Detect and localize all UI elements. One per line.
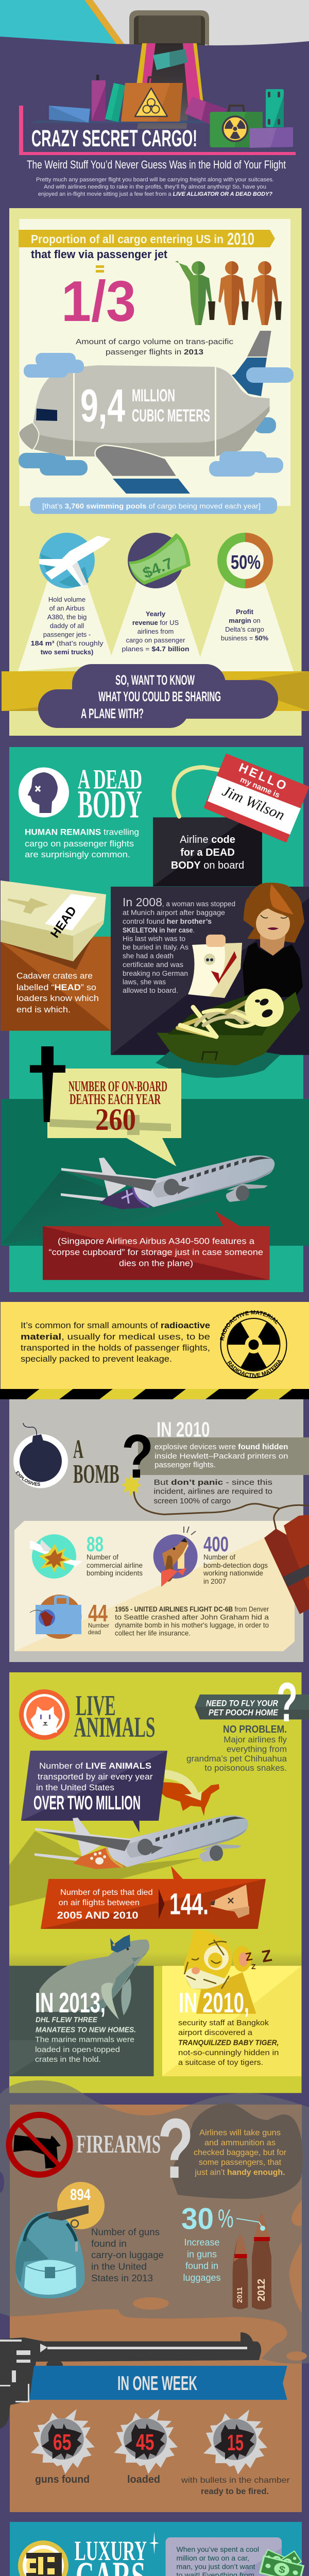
corpse cupboard callout: dies on the plane) bbox=[119, 1258, 193, 1268]
9.4 million stat bbox=[80, 380, 210, 432]
tiger box: TRANQUILIZED BABY TIGER, bbox=[178, 2038, 279, 2047]
stat: detection dogs: Number of bbox=[203, 1553, 235, 1561]
icon: passengers, one of three highlighted bbox=[175, 261, 282, 325]
pet pooch banner bbox=[195, 1671, 309, 1733]
icon: cat badge bbox=[19, 1689, 70, 1740]
orange crate panel: end is which. bbox=[16, 1005, 71, 1014]
stat: 30 percent increase: found in bbox=[185, 2261, 218, 2271]
equals sign bbox=[96, 265, 104, 273]
no problem text bbox=[186, 1724, 287, 1773]
tiger box: security staff at Bangkok bbox=[178, 2019, 269, 2027]
olive band with explosives text: passenger flights. bbox=[154, 1461, 216, 1469]
on-board deaths stat bbox=[68, 1079, 167, 1137]
don't panic text: incident, airlines are required to bbox=[153, 1487, 272, 1496]
icon: dead dog bbox=[211, 1885, 249, 1918]
name tag bbox=[174, 755, 308, 841]
stat: detection dogs: in 2007 bbox=[203, 1578, 226, 1585]
question text: SO, WANT TO KNOW bbox=[115, 672, 195, 688]
panel: a dead body bbox=[1, 747, 309, 1292]
lilac text box: When you’ve spent a cool bbox=[176, 2545, 259, 2553]
illustration: passenger jet with purple tail bbox=[61, 1155, 274, 1209]
human remains text: HUMAN REMAINS travelling bbox=[25, 827, 139, 837]
question text: A PLANE WITH? bbox=[81, 706, 144, 721]
purple flat case bbox=[250, 127, 293, 148]
icon: bomb: EXPLOSIVES bbox=[15, 1471, 40, 1486]
panel: a bomb bbox=[9, 1399, 309, 1662]
icon: dollar bill on purple circle: $4.7 bbox=[141, 555, 176, 582]
gold banner bbox=[19, 229, 275, 248]
lilac text box: million or two on a car, bbox=[176, 2554, 249, 2562]
swimming pools pill bbox=[30, 498, 277, 514]
teal background bbox=[9, 747, 303, 1292]
intro paragraph: enjoyed an in-flight movie sitting just a few feet from a LIVE ALLIGATOR OR A DEAD BODY? bbox=[38, 191, 272, 197]
dark smoke blob with text bbox=[171, 2103, 303, 2199]
airline code box: for a DEAD bbox=[180, 847, 235, 858]
stat: 30 percent increase: in guns bbox=[187, 2249, 217, 2260]
title frame bbox=[19, 106, 296, 155]
icon: bullets 2011 and 2012: 2011 bbox=[235, 2287, 244, 2303]
stat: 15 ready to be fired: 15 bbox=[227, 2430, 244, 2455]
don't panic text bbox=[153, 1478, 272, 1505]
shadow bbox=[156, 1051, 281, 1078]
section heading: ANIMALS bbox=[74, 1711, 156, 1743]
in one week banner: IN ONE WEEK bbox=[117, 2372, 197, 2395]
stat: 15 ready to be fired bbox=[181, 2410, 290, 2496]
manatee box: MANATEES TO NEW HOMES. bbox=[36, 2025, 136, 2034]
pets died callout: on air flights between bbox=[59, 1899, 140, 1907]
icon: radiation badge bbox=[220, 1310, 287, 1378]
icon: orange passenger bbox=[251, 261, 282, 325]
panel inner bbox=[20, 219, 290, 506]
one third stat: 1/3 bbox=[61, 269, 136, 333]
stat: number dead: to Seattle crashed after John Graham hid a bbox=[115, 1613, 269, 1621]
icon: bullets 2011 and 2012: 2012 bbox=[256, 2279, 267, 2301]
dark smoke blob with text: just ain’t handy enough. bbox=[195, 2168, 285, 2177]
skeleton story panel: certificate and was bbox=[123, 961, 183, 969]
manatee box bbox=[9, 1935, 153, 2076]
subheading: that flew via passenger jet bbox=[31, 248, 168, 261]
radioactive text bbox=[21, 1320, 210, 1364]
icon: dynamite bbox=[264, 1515, 309, 1614]
panel background bbox=[9, 208, 302, 736]
stat: 894 guns with backpack bbox=[15, 2182, 164, 2298]
pets died callout: 144. bbox=[169, 1888, 209, 1921]
gun smoke overlay bbox=[0, 2080, 309, 2364]
swimming pools pill: [that’s 3,760 swimming pools of cargo being moved each year] bbox=[42, 502, 261, 510]
don't panic text: But don’t panic - since this bbox=[153, 1478, 272, 1487]
plane shadow beam bbox=[1, 1171, 227, 1244]
skeleton story panel: control found her brother’s bbox=[123, 918, 212, 925]
stat: number dead: dead bbox=[88, 1629, 101, 1636]
revenue text: Yearly bbox=[146, 610, 166, 618]
airline code box: BODY on board bbox=[171, 860, 244, 871]
skeleton story panel: she had a death bbox=[123, 952, 174, 960]
cargo pile illustration bbox=[31, 49, 293, 148]
stat: detection dogs: working nationwide bbox=[203, 1569, 263, 1577]
green case bbox=[105, 83, 125, 122]
live animals speech bubble: Number of LIVE ANIMALS bbox=[39, 1761, 151, 1771]
stat: 30 percent increase bbox=[181, 2202, 271, 2310]
section heading: A bbox=[73, 1435, 83, 1464]
no problem text: to poisonous snakes. bbox=[204, 1763, 287, 1773]
corpse cupboard callout bbox=[43, 1211, 270, 1280]
icon: EB badge bbox=[18, 2540, 68, 2576]
gold banner: 2010 bbox=[227, 229, 254, 248]
manatee box: DHL FLEW THREE bbox=[36, 2015, 98, 2024]
stat: 15 ready to be fired: ready to be fired. bbox=[201, 2486, 269, 2496]
section heading: A DEAD bbox=[78, 764, 142, 794]
profit margin text bbox=[221, 608, 269, 642]
live animals speech bubble: transported by air every year bbox=[38, 1772, 153, 1782]
orange crate panel: loaders know which bbox=[16, 993, 99, 1003]
suitcase bbox=[157, 992, 300, 1065]
9.4 million stat: 9,4 bbox=[80, 380, 125, 432]
cross tombstone callout bbox=[30, 1046, 181, 1166]
blue case bbox=[49, 106, 90, 123]
panel: live animals bbox=[9, 1671, 309, 2093]
stat: detection dogs: bomb-detection dogs bbox=[203, 1562, 268, 1569]
stat: bombing incidents: Number of bbox=[87, 1553, 118, 1561]
dark smoke blob with text: Airlines will take guns bbox=[199, 2129, 281, 2137]
firearms section content bbox=[0, 2101, 303, 2496]
illustration: passenger jet with paw print tail bbox=[35, 1816, 248, 1869]
name tag: my name is bbox=[239, 775, 281, 800]
stat: detection dogs bbox=[153, 1527, 268, 1587]
manatee box: IN 2013, bbox=[35, 1987, 106, 2019]
woman bbox=[243, 883, 304, 997]
panel background bbox=[9, 1672, 302, 2093]
stat: 30 percent increase: 30 bbox=[181, 2202, 214, 2236]
human remains text: are surprisingly common. bbox=[25, 850, 130, 859]
dark smoke blob with text: some passengers, that bbox=[199, 2158, 282, 2167]
9.4 million stat: CUBIC METERS bbox=[132, 406, 210, 426]
stat: 15 ready to be fired: with bullets in the chamber bbox=[181, 2476, 290, 2485]
dark green band bbox=[1, 1099, 309, 1246]
green radioactive case bbox=[210, 106, 263, 147]
icon: radiation badge: RADIOACTIVE MATERIAL bbox=[220, 1310, 278, 1341]
icon: bomb bbox=[13, 1423, 68, 1488]
stat: 45 loaded: loaded bbox=[127, 2474, 160, 2485]
on-board deaths stat: DEATHS EACH YEAR bbox=[70, 1092, 161, 1108]
icon: bullets 2011 and 2012 bbox=[233, 2213, 271, 2310]
live animals speech bubble bbox=[21, 1751, 167, 1833]
olive band with explosives text: explosive devices were found hidden bbox=[154, 1443, 288, 1451]
floor shadow bbox=[31, 121, 206, 123]
volume caption: Amount of cargo volume on trans-pacific bbox=[76, 338, 233, 346]
radioactive text: transported in the holds of passenger flights, bbox=[21, 1343, 210, 1353]
stat: number dead: 44 bbox=[88, 1600, 108, 1626]
volume caption bbox=[76, 338, 233, 357]
on-board deaths stat: NUMBER OF ON-BOARD bbox=[68, 1079, 167, 1095]
stat: 894 guns with backpack: carry-on luggage bbox=[91, 2250, 164, 2260]
profit margin text: Delta’s cargo bbox=[225, 625, 264, 633]
pet pooch banner: PET POOCH HOME bbox=[209, 1707, 279, 1718]
revenue text: planes = $4.7 billion bbox=[122, 645, 190, 653]
in 2010 heading: IN 2010 bbox=[157, 1418, 210, 1442]
pet pooch banner: NEED TO FLY YOUR bbox=[206, 1699, 279, 1708]
in one week banner bbox=[29, 2366, 287, 2400]
stat: number dead: 1955 - UNITED AIRLINES FLIGHT DC-6B from Denver bbox=[115, 1605, 269, 1613]
panel: proportion of cargo bbox=[9, 208, 302, 736]
hold volume text: daddy of all bbox=[50, 622, 84, 630]
skeleton story panel: SKELETON in her case. bbox=[123, 926, 195, 934]
tiger box: IN 2010, bbox=[179, 1987, 249, 2019]
death certificate bbox=[188, 935, 242, 998]
icon: green passenger bbox=[175, 261, 215, 325]
illustration: woman with certificate and skeleton in suitcase bbox=[156, 883, 304, 1078]
stat: bombing incidents: bombing incidents bbox=[87, 1569, 143, 1577]
stat: number dead: dynamite bomb in his mother's luggage, in order to bbox=[115, 1621, 269, 1629]
radioactive text: material , usually for medical uses, to be bbox=[21, 1332, 210, 1342]
purple upright case bbox=[92, 75, 106, 121]
stat: bombing incidents bbox=[30, 1532, 143, 1579]
dark smoke blob with text: and ammunition as bbox=[204, 2139, 276, 2147]
skeleton story panel: be buried in Italy. As bbox=[123, 943, 188, 951]
panel: firearms background bbox=[10, 2105, 302, 2512]
gold banner: Proportion of all cargo entering US in bbox=[31, 232, 224, 246]
profit margin text: business = 50% bbox=[221, 634, 269, 642]
stat: 65 guns found: 65 bbox=[53, 2430, 71, 2455]
volume caption: passenger flights in 2013 bbox=[106, 348, 203, 357]
skeleton story panel bbox=[111, 887, 309, 1055]
sparkles bbox=[64, 2532, 159, 2576]
stat: number dead: Number bbox=[88, 1622, 109, 1629]
section heading bbox=[74, 1690, 156, 1743]
hold volume text: two semi trucks) bbox=[41, 648, 93, 656]
illustration: sleeping tiger bbox=[184, 1929, 256, 2014]
orange biohazard case bbox=[121, 77, 183, 122]
intro paragraph: And with airlines needing to rake in the profits, they’ll fly almost anything! So, have you bbox=[44, 184, 266, 190]
no problem text: grandma’s pet Chihuahua bbox=[186, 1754, 287, 1764]
no problem text: everything from bbox=[227, 1744, 287, 1754]
illustration: arrow over US map bbox=[157, 1770, 219, 1816]
tiger box bbox=[162, 1929, 302, 2076]
illustration: manatee with cap bbox=[39, 1935, 149, 2020]
icon: dollar bill on purple circle bbox=[128, 533, 191, 588]
lilac text box: man, you just don’t want bbox=[176, 2563, 255, 2571]
icon: money bills bbox=[259, 2549, 304, 2576]
teal suitcase on ramp bbox=[153, 49, 187, 70]
hazard stripe bbox=[0, 1389, 309, 1399]
title: CRAZY SECRET CARGO! bbox=[31, 125, 197, 151]
skeleton story panel: laws, she was bbox=[123, 978, 166, 986]
zzz text: Z bbox=[244, 1950, 253, 1963]
question mark: ? bbox=[122, 1422, 153, 1491]
stat: 65 guns found: guns found bbox=[35, 2474, 90, 2485]
plane shadow bbox=[9, 1831, 202, 1906]
manatee box: loaded in open-topped bbox=[35, 2045, 120, 2054]
intro paragraph bbox=[36, 177, 274, 197]
section heading: LIVE bbox=[76, 1690, 116, 1722]
icon: orange passenger bbox=[218, 261, 249, 325]
revenue text: revenue for US bbox=[132, 619, 179, 626]
stat: 894 guns with backpack: States in 2013 bbox=[91, 2273, 153, 2283]
corpse cupboard callout: “corpse cupboard” for storage just in case someone bbox=[48, 1247, 263, 1257]
shaded band bbox=[9, 1929, 302, 1966]
teal upright case bbox=[266, 89, 284, 127]
orange crate panel: labelled “ HEAD” so bbox=[16, 982, 96, 992]
icon: revolver bbox=[0, 2332, 261, 2429]
name tag: Jim Wilson bbox=[220, 783, 287, 824]
stat: 894 guns with backpack: in the United bbox=[91, 2262, 147, 2272]
tiger box: a suitcase of toy tigers. bbox=[178, 2058, 263, 2067]
lilac text box bbox=[166, 2537, 282, 2576]
hold volume text: Hold volume bbox=[48, 596, 85, 603]
hold volume text: 184 m³ (that’s roughly bbox=[31, 639, 104, 647]
manatee box: The marine mammals were bbox=[35, 2036, 134, 2044]
airline code box: Airline code bbox=[180, 834, 235, 845]
section heading bbox=[73, 1435, 119, 1489]
stat: detection dogs: 400 bbox=[203, 1532, 229, 1556]
no problem text: NO PROBLEM. bbox=[223, 1724, 287, 1735]
radioactive text: It’s common for small amounts of radioactive bbox=[21, 1320, 210, 1330]
section heading bbox=[75, 2535, 147, 2576]
section heading bbox=[78, 764, 142, 826]
section heading: BOMB bbox=[73, 1460, 119, 1489]
icon: dead head bbox=[19, 768, 69, 817]
icon: 50 percent donut: 50% bbox=[231, 552, 261, 573]
stat: bombing incidents: commercial airline bbox=[87, 1562, 143, 1569]
stat: 894 guns with backpack: 894 bbox=[70, 2185, 91, 2204]
on-board deaths stat: 260 bbox=[95, 1103, 136, 1137]
radioactive text: specially packed to prevent leakage. bbox=[21, 1354, 172, 1364]
corpse cupboard callout: (Singapore Airlines Airbus A340-500 features a bbox=[58, 1236, 255, 1246]
stat: 45 loaded: 45 bbox=[136, 2430, 154, 2455]
icon: backpack and pistol bbox=[15, 2205, 89, 2298]
live animals speech bubble: in the United States bbox=[36, 1783, 114, 1792]
purple tilted case bbox=[185, 97, 228, 124]
transition banner and cloud bbox=[2, 664, 309, 728]
icon: no guns sign bbox=[9, 2115, 70, 2175]
section heading: BODY bbox=[78, 783, 142, 826]
hold volume text: passenger jets - bbox=[43, 631, 91, 638]
pets died callout: Number of pets that died bbox=[60, 1888, 153, 1897]
panel: luxury cars bbox=[10, 2522, 304, 2576]
stat: 30 percent increase: Increase bbox=[184, 2237, 220, 2247]
name tag: HELLO bbox=[237, 760, 290, 794]
fuse and spark bbox=[121, 1474, 309, 1529]
stat: bombing incidents: 88 bbox=[87, 1532, 104, 1556]
stat: 45 loaded bbox=[114, 2409, 178, 2485]
no problem text: Major airlines fly bbox=[224, 1735, 287, 1744]
skeleton story panel: allowed to board. bbox=[123, 987, 178, 994]
zzz text: Z bbox=[251, 1962, 256, 1971]
olive band with explosives text: inside Hewlett–Packard printers on bbox=[154, 1452, 288, 1461]
9.4 million stat: MILLION bbox=[132, 386, 175, 405]
stat: 65 guns found bbox=[31, 2409, 95, 2485]
human remains text: cargo on passenger flights bbox=[25, 839, 134, 849]
hold volume text: A380, the big bbox=[47, 613, 87, 621]
skeleton story panel: breaking no German bbox=[123, 970, 188, 977]
stat: number dead: collect her life insurance. bbox=[115, 1629, 191, 1637]
stat: number dead bbox=[30, 1595, 269, 1639]
hold volume text: of an Airbus bbox=[49, 604, 85, 612]
profit margin text: margin on bbox=[229, 617, 261, 624]
orange crate panel bbox=[1, 937, 111, 1031]
revenue text: cargo on passenger bbox=[126, 636, 185, 644]
live animals speech bubble: OVER TWO MILLION bbox=[33, 1792, 141, 1814]
profit margin text: Profit bbox=[236, 608, 254, 616]
skeleton story panel: In 2008, a woman was stopped bbox=[123, 895, 235, 909]
hold volume text bbox=[31, 596, 104, 656]
revenue text: airlines from bbox=[138, 628, 174, 635]
cadaver crate: HEAD bbox=[48, 904, 79, 941]
skeleton story panel: at Munich airport after baggage bbox=[123, 909, 225, 917]
question mark: ? bbox=[158, 2101, 194, 2196]
human remains text bbox=[25, 827, 139, 859]
dark smoke blob with text: checked baggage, but for bbox=[194, 2148, 287, 2157]
pets died callout: 2005 AND 2010 bbox=[57, 1910, 139, 1921]
intro paragraph: Pretty much any passenger flight you board will be carrying freight along with your suitcases. bbox=[36, 177, 274, 183]
olive band with explosives text bbox=[138, 1437, 309, 1475]
skeleton story panel: His last wish was to bbox=[123, 935, 185, 943]
revenue text bbox=[122, 610, 190, 653]
panel: radioactive material bbox=[1, 1302, 309, 1389]
pointer line bbox=[236, 2218, 265, 2231]
tiger box: not-so-cunningly hidden in bbox=[178, 2048, 279, 2057]
cadaver crate bbox=[1, 880, 106, 970]
spotlight cones bbox=[18, 581, 294, 680]
stat: 894 guns with backpack: Number of guns bbox=[91, 2227, 160, 2237]
don't panic text: screen 100% of cargo bbox=[153, 1497, 231, 1505]
stat: 894 guns with backpack: found in bbox=[91, 2239, 127, 2249]
orange crate panel: Cadaver crates are bbox=[16, 971, 93, 981]
stat: 30 percent increase: luggages bbox=[183, 2273, 221, 2283]
airline code box bbox=[153, 818, 262, 887]
question text bbox=[81, 672, 221, 721]
stat: 30 percent increase: % bbox=[218, 2204, 234, 2233]
manatee box: crates in the hold. bbox=[35, 2055, 101, 2064]
tiger box: airport discovered a bbox=[178, 2028, 253, 2037]
illustration: cargo plane with clouds bbox=[19, 331, 294, 494]
section heading: LUXURY bbox=[75, 2535, 147, 2566]
skeleton bbox=[178, 1002, 255, 1037]
panel background bbox=[10, 2522, 302, 2576]
header illustration: aircraft underside with cargo door bbox=[0, 0, 309, 129]
zzz text: Z bbox=[260, 1946, 273, 1966]
icon: 50 percent donut bbox=[217, 533, 273, 588]
pets died callout bbox=[41, 1866, 266, 1929]
zzz text bbox=[244, 1946, 273, 1971]
icon: radiation badge: RADIOACTIVE MATERIAL bbox=[227, 1360, 282, 1377]
icon: plane on blue circle bbox=[39, 533, 111, 588]
section heading: FIREARMS bbox=[76, 2129, 161, 2158]
cream stats panel bbox=[14, 1521, 295, 1651]
